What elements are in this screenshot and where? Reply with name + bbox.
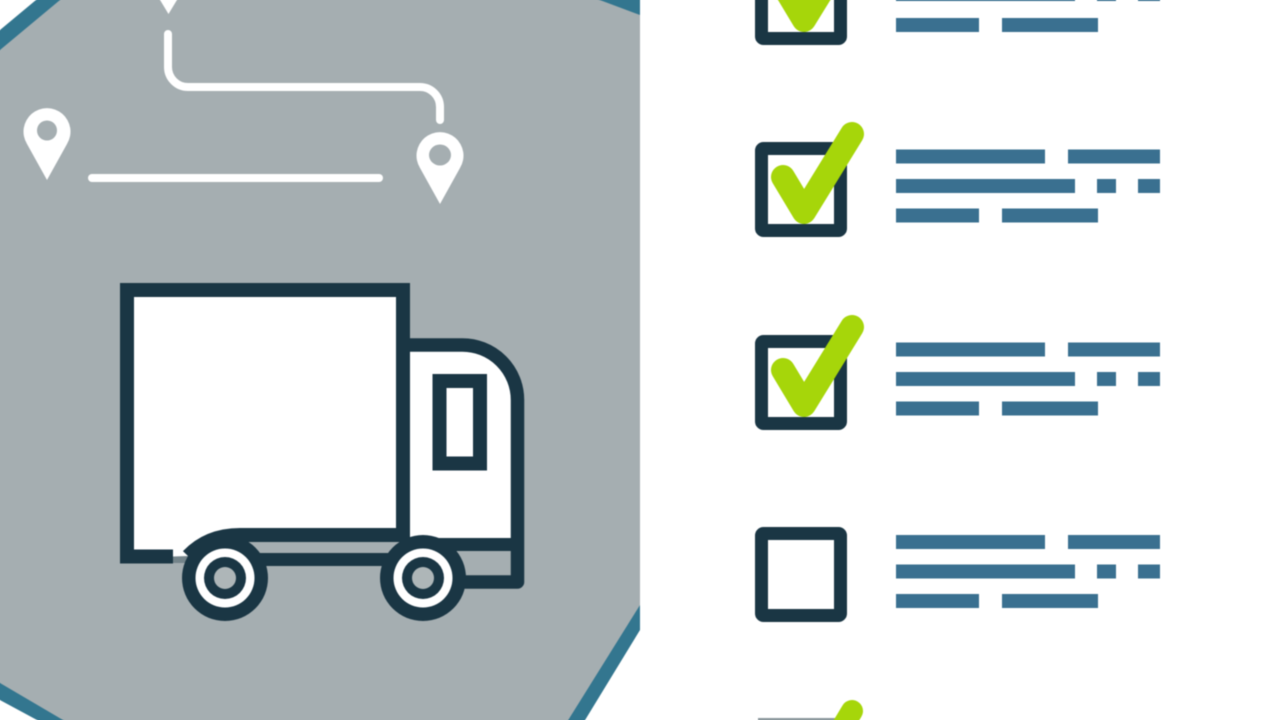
truck front wheel — [380, 535, 466, 621]
text lines placeholder — [896, 0, 1160, 32]
route line: connecting path — [168, 34, 440, 120]
green check mark tip — [834, 711, 852, 720]
checklist item 1 (cropped at top) — [762, 0, 1160, 38]
truck cargo box — [127, 290, 403, 556]
truck chassis beam — [250, 553, 395, 566]
route map — [24, 0, 464, 204]
checkbox checked — [762, 148, 840, 230]
checklist item 5 (cropped at bottom) — [758, 711, 852, 720]
route line: straight segment — [92, 174, 379, 182]
truck cab fill — [405, 345, 517, 545]
checklist item 4 (unchecked) — [762, 534, 1160, 616]
truck small grey step — [170, 550, 190, 563]
panel: grey octagon with teal edges — [0, 0, 640, 720]
green check mark — [783, 0, 852, 20]
text lines placeholder — [896, 150, 1160, 222]
checklist item 2 — [762, 134, 1160, 230]
truck cab outline — [405, 345, 518, 582]
truck cab lower bar — [430, 538, 517, 551]
green check mark — [783, 134, 852, 212]
text lines placeholder — [896, 342, 1160, 416]
checkbox top edge — [758, 718, 844, 720]
checklist item 3 — [762, 327, 1160, 424]
truck rear wheel — [182, 535, 268, 621]
green check mark — [783, 327, 852, 405]
icon: right location pin — [416, 132, 464, 204]
checkbox checked — [762, 342, 840, 424]
truck cab window — [440, 381, 480, 464]
icon: top location pin — [154, 0, 183, 14]
icon: left location pin — [24, 108, 71, 180]
checkbox checked — [762, 0, 840, 38]
icon: delivery truck — [127, 290, 518, 621]
text lines placeholder — [896, 535, 1160, 608]
checkbox empty — [762, 534, 840, 616]
